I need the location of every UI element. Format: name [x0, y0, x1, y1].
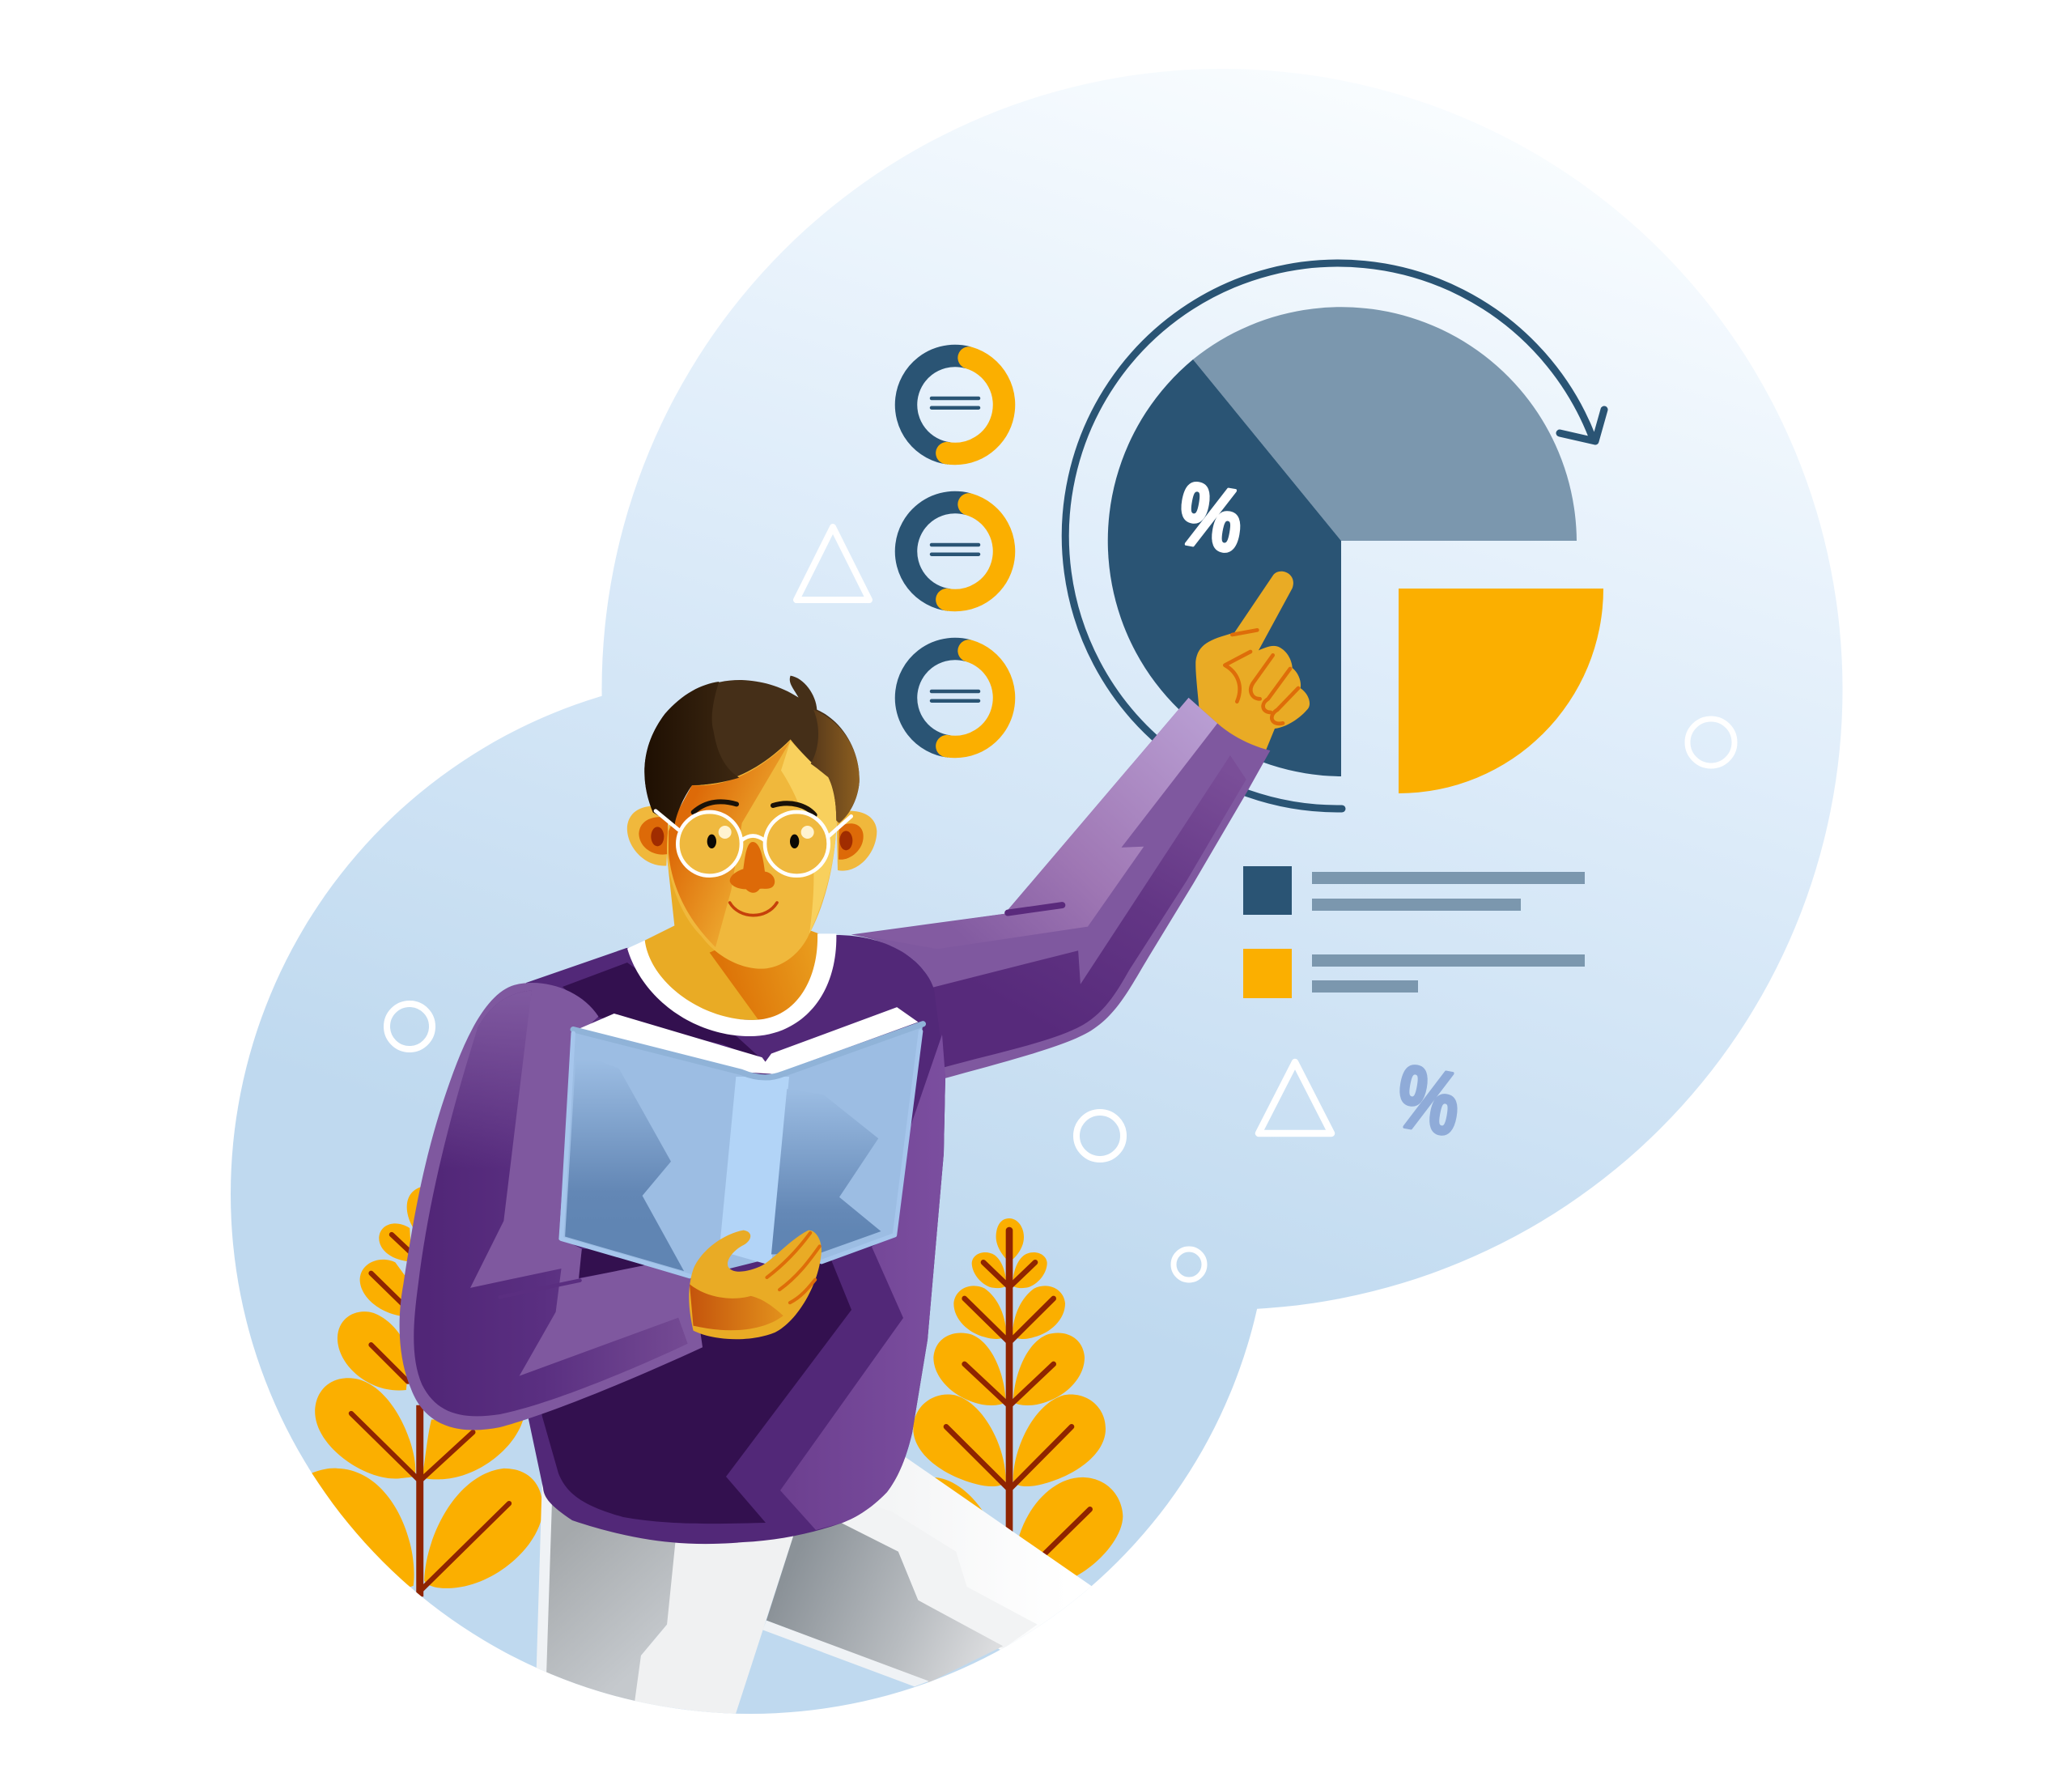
- sleeve base: [400, 983, 703, 1430]
- donut 3: [894, 637, 1016, 759]
- circular arrow: [1065, 263, 1604, 809]
- donut 2: [894, 491, 1016, 612]
- pie chart: [1065, 263, 1604, 809]
- middle white leg: [635, 1530, 796, 1716]
- eyes: [707, 826, 814, 848]
- nose: [730, 842, 775, 893]
- book spine: [720, 1077, 789, 1265]
- left arm: [400, 983, 703, 1430]
- elbow crease: [1008, 905, 1062, 913]
- face shadow: [669, 741, 791, 947]
- upper chest shadow: [563, 963, 765, 1062]
- hair: [644, 676, 860, 826]
- sleeve shadow: [414, 990, 688, 1416]
- donut 1: [894, 344, 1016, 465]
- leg edge strip: [536, 1485, 552, 1673]
- pie slice: grey: [1193, 307, 1577, 541]
- book cover: [558, 1024, 923, 1278]
- ear right: [836, 811, 877, 871]
- arm base: [851, 698, 1270, 1078]
- plant: left: [308, 1187, 543, 1596]
- plant: right: [913, 1218, 1123, 1577]
- book borders: [562, 1024, 923, 1276]
- open book: [558, 1007, 923, 1278]
- background: overlapping circles: [231, 69, 1842, 1714]
- right leg shadow: [766, 1520, 1003, 1682]
- hand holding book: [689, 1231, 822, 1339]
- neck: [645, 864, 819, 1020]
- left leg shadow: [546, 1498, 677, 1702]
- arm highlight: [857, 698, 1217, 949]
- pie slice: yellow: [1399, 589, 1603, 793]
- face highlight: [781, 741, 836, 933]
- percent sign, light blue: %: [1390, 1046, 1467, 1154]
- plants and legs clipped to lower circle: [308, 1187, 1123, 1716]
- right leg highlight: [870, 1457, 1091, 1650]
- torso: [518, 935, 945, 1544]
- left page shade: [565, 1052, 684, 1271]
- raised arm: [851, 698, 1270, 1078]
- donut icons: [894, 344, 1016, 759]
- torso light panel: [780, 1035, 945, 1530]
- chart legend: [1243, 866, 1585, 998]
- right leg lower strip: [762, 1621, 929, 1686]
- head and neck: [627, 676, 877, 1036]
- elbow crease: [500, 1281, 580, 1297]
- right page shade: [771, 1089, 881, 1255]
- ear left: [627, 806, 669, 865]
- torso base: [518, 935, 945, 1544]
- glasses frame: [656, 811, 851, 876]
- person: [400, 572, 1310, 1544]
- book pages: [580, 1007, 918, 1074]
- white decorative shapes: [387, 527, 1734, 1280]
- face: [667, 739, 836, 969]
- sleeve upper highlight: [424, 990, 532, 1172]
- smile: [730, 903, 777, 916]
- eyebrows: [694, 801, 815, 815]
- pointing hand: [1195, 572, 1310, 759]
- percent label on pie: %: [1171, 464, 1250, 572]
- pie slice: dark blue: [1108, 359, 1341, 776]
- collar: [627, 933, 836, 1036]
- torso shadow: [534, 1258, 851, 1524]
- arm shadow: [932, 755, 1246, 1068]
- glasses lenses: [677, 812, 829, 876]
- legs: white trousers: [536, 1457, 1104, 1716]
